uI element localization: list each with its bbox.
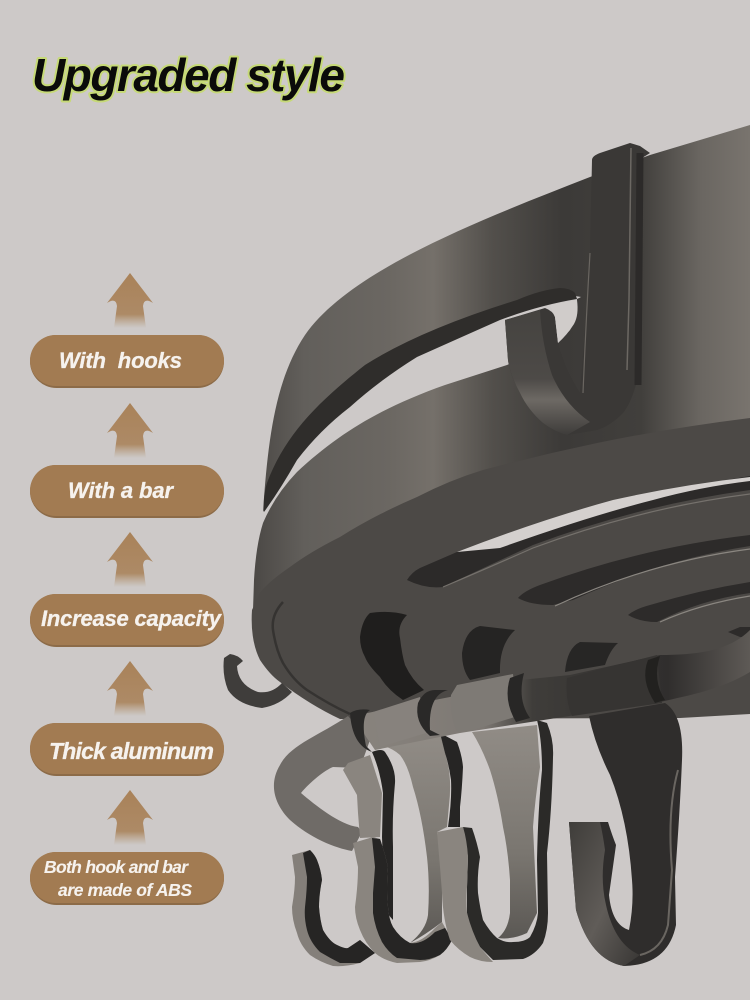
hanging hole 2 bbox=[462, 626, 515, 680]
pill: With hooks bbox=[30, 335, 224, 388]
pill: Increase capacity: Increase capacity bbox=[41, 606, 223, 631]
upper rail band bbox=[263, 125, 750, 512]
front hook far left bbox=[292, 850, 375, 966]
arrow 4 bbox=[107, 661, 153, 716]
pill: Both hook and bar are made of ABS bbox=[30, 852, 224, 905]
arrow 5 bbox=[107, 790, 153, 845]
slot 3 bbox=[628, 582, 750, 622]
rail underside shadow bbox=[264, 288, 577, 512]
slot 4 bbox=[728, 627, 750, 637]
hook four bbox=[569, 703, 682, 966]
rail loop end bbox=[274, 716, 370, 851]
pill: Increase capacity bbox=[30, 594, 224, 647]
hanging hole 1 bbox=[360, 612, 424, 700]
pill: With a bar bbox=[30, 465, 224, 518]
hook opening bbox=[550, 300, 578, 343]
pill: Thick aluminum: Thick aluminum bbox=[49, 738, 214, 764]
title: Upgraded style bbox=[32, 49, 345, 101]
arrow 2 bbox=[107, 403, 153, 458]
sleeve middle bbox=[451, 674, 518, 731]
arrow 3 bbox=[107, 532, 153, 587]
lower rail band bbox=[253, 250, 750, 610]
pill: Both hook and bar are made of ABS: are made of ABS bbox=[58, 880, 192, 900]
product: corner shelf rack bbox=[224, 125, 750, 966]
base tray inner edge bbox=[273, 602, 350, 714]
hanging hole 3 bbox=[565, 642, 618, 672]
pill: With a bar: With a bar bbox=[68, 478, 174, 503]
slot 1 with opening bbox=[407, 476, 750, 587]
sleeve right bbox=[567, 655, 662, 716]
hook curl front bbox=[505, 310, 590, 435]
pill: Both hook and bar are made of ABS: Both hook and bar bbox=[44, 857, 189, 877]
base tray bbox=[252, 418, 750, 719]
pill: With hooks: With hooks bbox=[59, 348, 182, 373]
slot 2 bbox=[518, 535, 750, 606]
top wall hook bbox=[505, 143, 650, 435]
hanging rod bbox=[350, 630, 750, 752]
pill: Thick aluminum bbox=[30, 723, 224, 776]
hook one stem bbox=[343, 750, 395, 920]
sleeve left bbox=[373, 697, 426, 747]
back small hook bbox=[224, 654, 292, 708]
hook three bbox=[437, 720, 553, 962]
arrow 1 bbox=[107, 273, 153, 328]
hook two bbox=[353, 733, 463, 963]
